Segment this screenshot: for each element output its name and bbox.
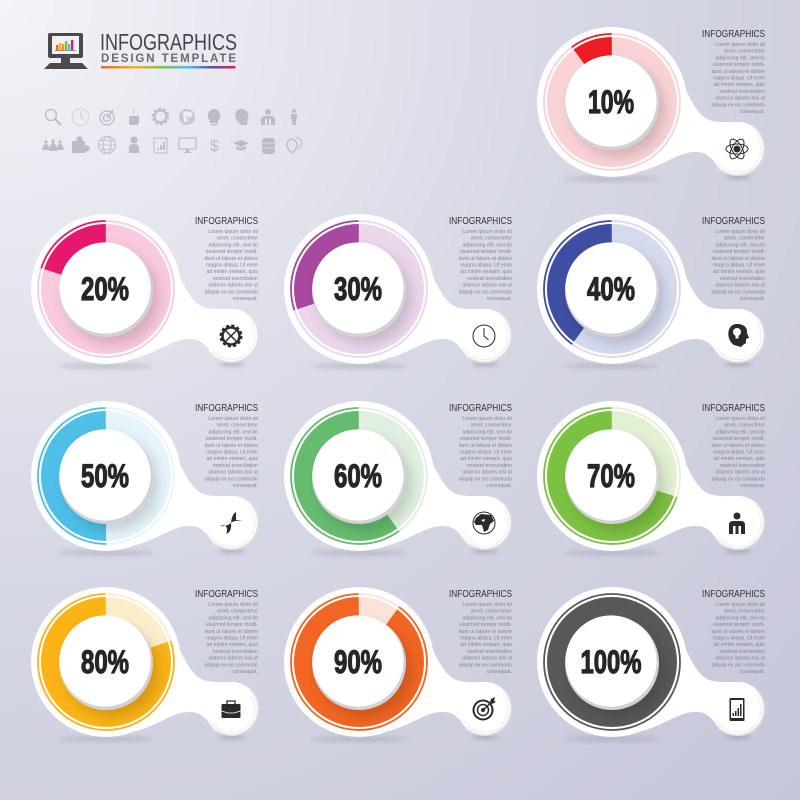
text block: magna aliqua. Ut enim <box>206 262 258 268</box>
text block: consequat. <box>740 296 765 302</box>
icon: wire globe <box>98 136 116 154</box>
icon: dollar sign: $ <box>210 138 219 155</box>
text block <box>702 403 766 489</box>
text block: INFOGRAPHICS <box>702 29 765 40</box>
text block: Lorem ipsum dolor sit <box>462 416 513 422</box>
icon set <box>42 108 302 155</box>
text block: ullamco laboris nisi ut <box>462 283 513 289</box>
donut gauge <box>52 608 160 716</box>
centre disc <box>565 55 659 150</box>
text block: ad minim veniam, quis <box>206 269 258 275</box>
text block: INFOGRAPHICS <box>449 403 512 414</box>
blob panel <box>284 401 512 551</box>
icon: globe <box>179 109 195 125</box>
text block <box>449 216 513 302</box>
rainbow rule <box>101 66 236 68</box>
text block: consequat. <box>740 669 765 675</box>
text block: consequat. <box>233 296 258 302</box>
text block: Lorem ipsum dolor sit <box>715 416 766 422</box>
text block: magna aliqua. Ut enim <box>460 262 512 268</box>
blob panel <box>31 401 259 551</box>
percentage: 90% <box>334 644 382 680</box>
percentage: 70% <box>587 458 635 494</box>
text block: amet, consectetur <box>724 49 765 55</box>
icon hub <box>712 496 765 550</box>
text block: consequat. <box>487 669 512 675</box>
text block: consequat. <box>487 483 512 489</box>
text block: magna aliqua. Ut enim <box>713 262 765 268</box>
text block: aliquip ex ea commodo <box>205 662 258 668</box>
text block: INFOGRAPHICS <box>449 216 512 227</box>
text block: INFOGRAPHICS <box>449 589 512 600</box>
text block: aliquip ex ea commodo <box>205 476 258 482</box>
donut gauge <box>52 422 160 530</box>
text block: magna aliqua. Ut enim <box>713 76 765 82</box>
card: 90% <box>284 587 513 742</box>
text block: Lorem ipsum dolor sit <box>715 229 766 235</box>
text block: eiusmod tempor incidi- <box>460 249 512 255</box>
icon: database <box>262 138 275 154</box>
text block: amet, consectetur <box>724 423 765 429</box>
ground shadow <box>311 549 498 556</box>
centre disc <box>565 242 659 337</box>
text block: eiusmod tempor incidi- <box>713 249 765 255</box>
centre disc <box>565 615 659 710</box>
text block: dunt ut labore et dolore <box>712 629 765 635</box>
text block <box>702 216 766 302</box>
text block: nostrud exercitation <box>467 276 512 282</box>
ground shadow <box>311 362 498 368</box>
text block: amet, consectetur <box>471 609 512 615</box>
text block: nostrud exercitation <box>213 276 258 282</box>
text block <box>449 589 513 675</box>
text block: aliquip ex ea commodo <box>712 289 765 295</box>
subtitle: DESIGN TEMPLATE <box>101 53 236 65</box>
text block: adipiscing elit, sed do <box>715 429 765 435</box>
text block: adipiscing elit, sed do <box>208 242 258 248</box>
text block: nostrud exercitation <box>720 463 765 469</box>
text block: INFOGRAPHICS <box>195 403 258 414</box>
text block: consequat. <box>740 109 765 115</box>
text block: ad minim veniam, quis <box>460 456 512 462</box>
icon: clock <box>473 325 495 347</box>
thin ring gauge <box>544 408 680 544</box>
thin ring gauge <box>291 408 427 544</box>
text block: ad minim veniam, quis <box>713 269 765 275</box>
text block: aliquip ex ea commodo <box>712 102 765 108</box>
text block: aliquip ex ea commodo <box>459 289 512 295</box>
text block: magna aliqua. Ut enim <box>713 636 765 642</box>
text block: ullamco laboris nisi ut <box>715 96 766 102</box>
text block: Lorem ipsum dolor sit <box>208 416 259 422</box>
text block: Lorem ipsum dolor sit <box>462 602 513 608</box>
text block: amet, consectetur <box>471 423 512 429</box>
text block: amet, consectetur <box>217 423 258 429</box>
text block: dunt ut labore et dolore <box>712 256 765 262</box>
text block: Lorem ipsum dolor sit <box>208 602 259 608</box>
text block: consequat. <box>487 296 512 302</box>
thin ring gauge <box>544 34 680 170</box>
text block: eiusmod tempor incidi- <box>460 622 512 628</box>
donut gauge <box>558 422 666 530</box>
centre disc <box>565 429 659 524</box>
text block: magna aliqua. Ut enim <box>206 636 258 642</box>
text block: nostrud exercitation <box>720 89 765 95</box>
text block: dunt ut labore et dolore <box>205 256 258 262</box>
ground shadow <box>564 362 751 368</box>
text block: ad minim veniam, quis <box>713 82 765 88</box>
text block: dunt ut labore et dolore <box>712 69 765 75</box>
ground shadow <box>58 549 245 556</box>
text block: eiusmod tempor incidi- <box>713 62 765 68</box>
donut gauge <box>305 608 413 716</box>
donut gauge <box>305 422 413 530</box>
ground shadow <box>311 735 498 742</box>
icon hub <box>458 496 512 550</box>
thin ring gauge <box>38 408 174 544</box>
icon: user <box>129 136 139 153</box>
text block: adipiscing elit, sed do <box>208 429 258 435</box>
text block: nostrud exercitation <box>720 276 765 282</box>
header logo <box>44 29 237 69</box>
text block <box>702 589 766 675</box>
blob panel <box>537 401 765 551</box>
icon: person standing <box>291 109 297 125</box>
ground shadow <box>564 549 751 556</box>
card: 50% <box>31 401 259 556</box>
text block: ullamco laboris nisi ut <box>462 470 513 476</box>
centre disc <box>312 615 406 710</box>
text block: eiusmod tempor incidi- <box>713 622 765 628</box>
ground shadow <box>564 735 751 742</box>
card: 30% <box>284 214 513 368</box>
icon hub <box>458 682 512 736</box>
centre disc <box>59 242 153 337</box>
text block: eiusmod tempor incidi- <box>713 436 765 442</box>
icon hub <box>712 122 765 176</box>
text block: amet, consectetur <box>217 609 258 615</box>
blob panel <box>284 587 512 737</box>
icon: businessman <box>261 109 275 125</box>
blob panel <box>284 214 512 364</box>
icon: gear <box>221 326 241 346</box>
percentage: 60% <box>334 458 382 494</box>
text block <box>702 29 766 115</box>
text block: amet, consectetur <box>217 236 258 242</box>
ground shadow <box>58 362 245 368</box>
text block <box>195 589 259 675</box>
percentage: 100% <box>580 644 642 680</box>
text block: INFOGRAPHICS <box>702 403 765 414</box>
ground shadow <box>564 175 751 182</box>
percentage: 50% <box>81 458 129 494</box>
text block: magna aliqua. Ut enim <box>460 636 512 642</box>
icon: DNA helix <box>220 512 242 534</box>
text block: amet, consectetur <box>724 609 765 615</box>
thin ring gauge <box>291 221 427 357</box>
text block: amet, consectetur <box>471 236 512 242</box>
title: INFOGRAPHICS <box>100 29 237 55</box>
card: 80% <box>31 587 259 742</box>
icon: head with bulb <box>728 324 749 347</box>
text block: INFOGRAPHICS <box>702 216 765 227</box>
icon: atom <box>726 137 748 161</box>
text block: dunt ut labore et dolore <box>205 629 258 635</box>
text block: Lorem ipsum dolor sit <box>715 602 766 608</box>
percentage: 20% <box>81 271 129 307</box>
text block: eiusmod tempor incidi- <box>460 436 512 442</box>
text block: eiusmod tempor incidi- <box>206 249 258 255</box>
text block: nostrud exercitation <box>720 649 765 655</box>
blob panel <box>31 587 259 737</box>
text block: ullamco laboris nisi ut <box>208 656 259 662</box>
text block: adipiscing elit, sed do <box>715 615 765 621</box>
text block: dunt ut labore et dolore <box>459 256 512 262</box>
card: 70% <box>537 401 766 556</box>
text block: Lorem ipsum dolor sit <box>208 229 259 235</box>
blob panel <box>537 587 765 737</box>
text block: adipiscing elit, sed do <box>462 242 512 248</box>
text block: ullamco laboris nisi ut <box>462 656 513 662</box>
text block: amet, consectetur <box>724 236 765 242</box>
text block: INFOGRAPHICS <box>702 589 765 600</box>
icon hub <box>206 682 259 736</box>
blob panel <box>537 214 765 364</box>
text block <box>449 403 513 489</box>
percentage: 80% <box>81 644 129 680</box>
text block: adipiscing elit, sed do <box>208 615 258 621</box>
blob panel <box>31 214 259 364</box>
icon: briefcase <box>222 701 240 718</box>
icon: graduation cap <box>233 140 249 150</box>
text block: ad minim veniam, quis <box>713 642 765 648</box>
icon hub <box>458 310 512 363</box>
centre disc <box>59 615 153 710</box>
text block: ad minim veniam, quis <box>206 456 258 462</box>
text block: aliquip ex ea commodo <box>712 662 765 668</box>
percentage: 40% <box>587 271 635 307</box>
card: 20% <box>31 214 259 368</box>
icon: lightbulb <box>208 109 220 126</box>
text block: aliquip ex ea commodo <box>459 476 512 482</box>
text block <box>195 403 259 489</box>
text block: dunt ut labore et dolore <box>712 443 765 449</box>
icon: businessman <box>729 512 745 534</box>
text block: nostrud exercitation <box>213 649 258 655</box>
icon: globe <box>473 512 495 534</box>
text block: dunt ut labore et dolore <box>459 629 512 635</box>
text block: Lorem ipsum dolor sit <box>462 229 513 235</box>
donut gauge <box>558 48 666 156</box>
text block: magna aliqua. Ut enim <box>206 450 258 456</box>
centre disc <box>59 429 153 524</box>
donut gauge <box>52 235 160 343</box>
icon hub <box>712 310 765 363</box>
text block: nostrud exercitation <box>467 649 512 655</box>
icon: desktop display <box>179 138 196 153</box>
icon: computer monitor with chart <box>44 33 88 69</box>
thin ring gauge <box>544 594 680 730</box>
donut gauge <box>558 235 666 343</box>
centre disc <box>312 429 406 524</box>
text block: INFOGRAPHICS <box>195 589 258 600</box>
text block: adipiscing elit, sed do <box>715 55 765 61</box>
icon: chart document <box>154 138 167 153</box>
text block: aliquip ex ea commodo <box>459 662 512 668</box>
icon: gear <box>153 109 168 124</box>
text block: INFOGRAPHICS <box>195 216 258 227</box>
icon: team <box>42 139 64 151</box>
text block: magna aliqua. Ut enim <box>460 450 512 456</box>
thin ring gauge <box>38 594 174 730</box>
centre disc <box>312 242 406 337</box>
text block: dunt ut labore et dolore <box>459 443 512 449</box>
text block: ullamco laboris nisi ut <box>208 470 259 476</box>
text block: nostrud exercitation <box>213 463 258 469</box>
text block: consequat. <box>740 483 765 489</box>
icon: target <box>100 110 114 125</box>
text block: ullamco laboris nisi ut <box>715 656 766 662</box>
text block: ullamco laboris nisi ut <box>715 283 766 289</box>
text block: ullamco laboris nisi ut <box>715 470 766 476</box>
icon: coffee cup <box>129 109 139 125</box>
text block: ad minim veniam, quis <box>713 456 765 462</box>
text block: aliquip ex ea commodo <box>712 476 765 482</box>
thin ring gauge <box>544 221 680 357</box>
card: 60% <box>284 401 513 556</box>
text block: ad minim veniam, quis <box>460 269 512 275</box>
text block: Lorem ipsum dolor sit <box>715 42 766 48</box>
text block: eiusmod tempor incidi- <box>206 436 258 442</box>
text block <box>195 216 259 302</box>
percentage: 10% <box>588 84 634 120</box>
text block: magna aliqua. Ut enim <box>713 450 765 456</box>
text block: aliquip ex ea commodo <box>205 289 258 295</box>
donut gauge <box>305 235 413 343</box>
text block: ad minim veniam, quis <box>206 642 258 648</box>
ground shadow <box>58 735 245 742</box>
icon: puzzle piece <box>72 136 90 153</box>
thin ring gauge <box>38 221 174 357</box>
blob panel <box>537 27 765 177</box>
text block: eiusmod tempor incidi- <box>206 622 258 628</box>
text block: nostrud exercitation <box>467 463 512 469</box>
text block: consequat. <box>233 669 258 675</box>
icon: target with arrow <box>474 697 496 720</box>
icon: tablet with chart <box>730 698 744 721</box>
icon hub <box>206 310 259 363</box>
text block: dunt ut labore et dolore <box>205 443 258 449</box>
percentage: 30% <box>334 271 382 307</box>
text block: adipiscing elit, sed do <box>462 615 512 621</box>
icon: magnifier <box>46 110 61 125</box>
icon hub <box>712 682 765 736</box>
text block: adipiscing elit, sed do <box>715 242 765 248</box>
icon: clock <box>72 108 89 126</box>
card: 40% <box>537 214 766 368</box>
card: 10% <box>537 27 766 182</box>
text block: ad minim veniam, quis <box>460 642 512 648</box>
text block: adipiscing elit, sed do <box>462 429 512 435</box>
icon hub <box>206 496 259 550</box>
card: 100% <box>537 587 766 742</box>
icon: location pins <box>287 138 302 153</box>
icon: head <box>235 109 248 125</box>
thin ring gauge <box>291 594 427 730</box>
text block: ullamco laboris nisi ut <box>208 283 259 289</box>
donut gauge <box>558 608 666 716</box>
text block: consequat. <box>233 483 258 489</box>
